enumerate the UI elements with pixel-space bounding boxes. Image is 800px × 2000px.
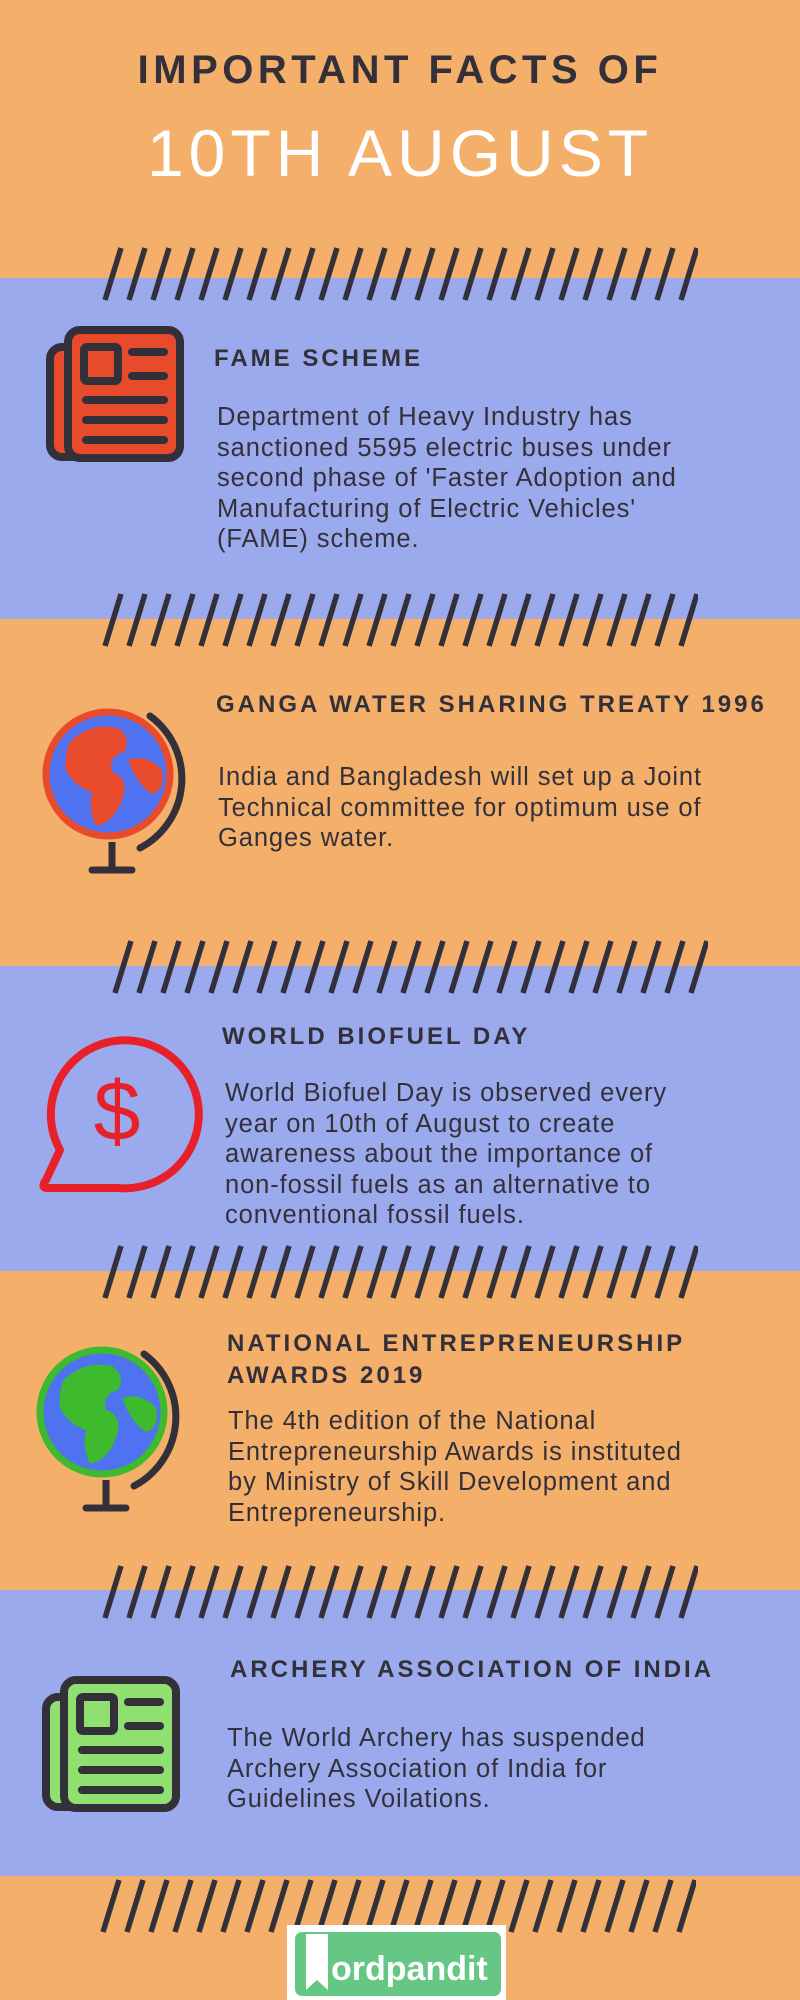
text 3: non-fossil fuels as an alternative to	[225, 1171, 651, 1199]
text 3: awareness about the importance of	[225, 1140, 653, 1168]
heading 2: GANGA WATER SHARING TREATY 1996	[216, 691, 767, 718]
icon: globe red	[46, 712, 182, 870]
heading 4: AWARDS 2019	[227, 1362, 425, 1389]
slash divider 1	[102, 244, 698, 302]
slash divider 4	[102, 1242, 698, 1300]
text 1: Department of Heavy Industry has	[217, 403, 633, 431]
slash divider 5	[102, 1562, 698, 1620]
heading 5: ARCHERY ASSOCIATION OF INDIA	[230, 1656, 714, 1683]
text 5: Guidelines Voilations.	[227, 1785, 491, 1813]
text 2: Technical committee for optimum use of	[218, 794, 701, 822]
text 4: Entrepreneurship.	[228, 1499, 446, 1527]
slash divider 2	[102, 590, 698, 648]
text 1: (FAME) scheme.	[217, 525, 419, 553]
text 1: sanctioned 5595 electric buses under	[217, 434, 672, 462]
text 3: World Biofuel Day is observed every	[225, 1079, 667, 1107]
heading 1: FAME SCHEME	[214, 345, 423, 372]
icon: newspaper green	[46, 1680, 176, 1808]
heading 3: WORLD BIOFUEL DAY	[222, 1023, 530, 1050]
logo: wordpandit: ordpandit	[331, 1950, 488, 1988]
text 1: second phase of 'Faster Adoption and	[217, 464, 677, 492]
logo: wordpandit	[287, 1925, 506, 2000]
icon: newspaper red	[50, 330, 180, 458]
text 3: year on 10th of August to create	[225, 1110, 615, 1138]
slash divider 6	[100, 1876, 696, 1934]
text 4: The 4th edition of the National	[228, 1407, 596, 1435]
text 3: conventional fossil fuels.	[225, 1201, 525, 1229]
icon: globe green	[40, 1350, 176, 1508]
text 2: Ganges water.	[218, 824, 394, 852]
heading 4: NATIONAL ENTREPRENEURSHIP	[227, 1330, 685, 1357]
text 5: Archery Association of India for	[227, 1755, 607, 1783]
text 1: Manufacturing of Electric Vehicles'	[217, 495, 636, 523]
title: 10TH AUGUST	[147, 116, 653, 190]
icon: dollar speech bubble: $	[94, 1064, 140, 1158]
text 2: India and Bangladesh will set up a Joint	[218, 763, 702, 791]
text 4: by Ministry of Skill Development and	[228, 1468, 671, 1496]
title	[138, 48, 662, 190]
title: IMPORTANT FACTS OF	[138, 48, 662, 92]
slash divider 3	[112, 937, 708, 995]
text 4: Entrepreneurship Awards is instituted	[228, 1438, 682, 1466]
text 5: The World Archery has suspended	[227, 1724, 646, 1752]
icon: dollar speech bubble	[43, 1040, 199, 1188]
